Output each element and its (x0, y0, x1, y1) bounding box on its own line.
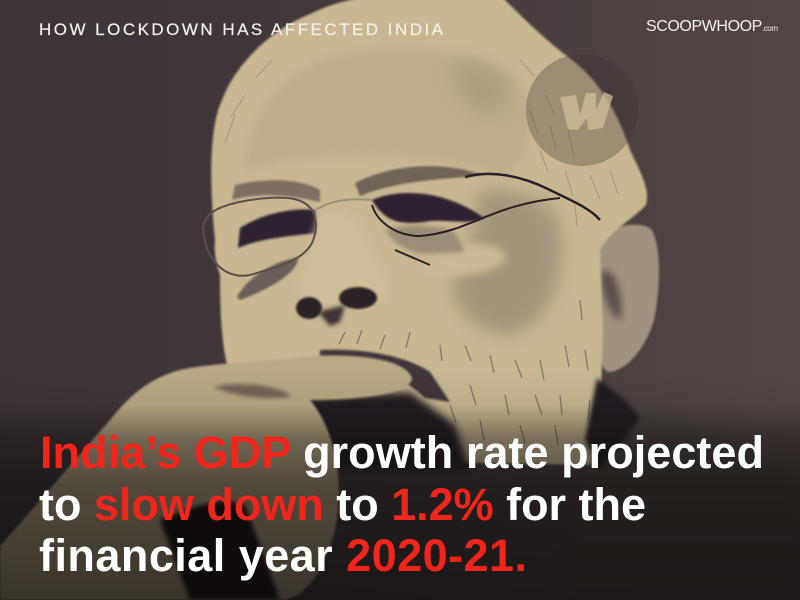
under right eye lines (385, 226, 465, 254)
headline text (39, 427, 764, 581)
forehead grey patch (450, 63, 507, 112)
ear inner shadow (600, 270, 621, 322)
under finger dark area (285, 392, 470, 470)
brand logo: scoopwhoop: SCOOPWHOOP.com (646, 18, 778, 35)
beard streaks (339, 300, 590, 445)
palm gap shadow (160, 502, 280, 600)
glasses wires (203, 174, 600, 276)
watermark mark (560, 92, 613, 130)
title: how lockdown has affected india: HOW LOCKDOWN HAS AFFECTED INDIA (39, 20, 444, 39)
ear (584, 225, 659, 372)
neck shadow (585, 378, 640, 470)
left hand and wrist (0, 355, 412, 600)
head and hair (211, 0, 647, 465)
headline line 3: financial year 2020-21. (39, 530, 527, 581)
headline line 2: to slow down to 1.2% for the (39, 479, 646, 530)
bottom dark gradient (0, 370, 800, 600)
left eyebrow (232, 180, 320, 202)
headline line 1: India’s GDP growth rate projected (40, 427, 764, 478)
cheek highlight (415, 244, 505, 276)
shirt and shoulder (560, 405, 800, 600)
forehead skin (245, 48, 531, 175)
hair streaks (225, 60, 618, 227)
under nose shadow (318, 305, 345, 326)
right eyebrow (355, 166, 482, 196)
left eye socket (238, 210, 317, 248)
finger crease (213, 384, 290, 398)
right nostril (339, 287, 377, 309)
mouth shadow line (320, 350, 450, 402)
watermark badge (526, 54, 638, 166)
nose highlight (297, 211, 389, 310)
watermark circle (526, 54, 638, 166)
left nostril (296, 297, 322, 319)
under left eye bag (237, 258, 298, 300)
temple and cheek shadow (453, 190, 562, 335)
right eye socket (372, 193, 484, 223)
